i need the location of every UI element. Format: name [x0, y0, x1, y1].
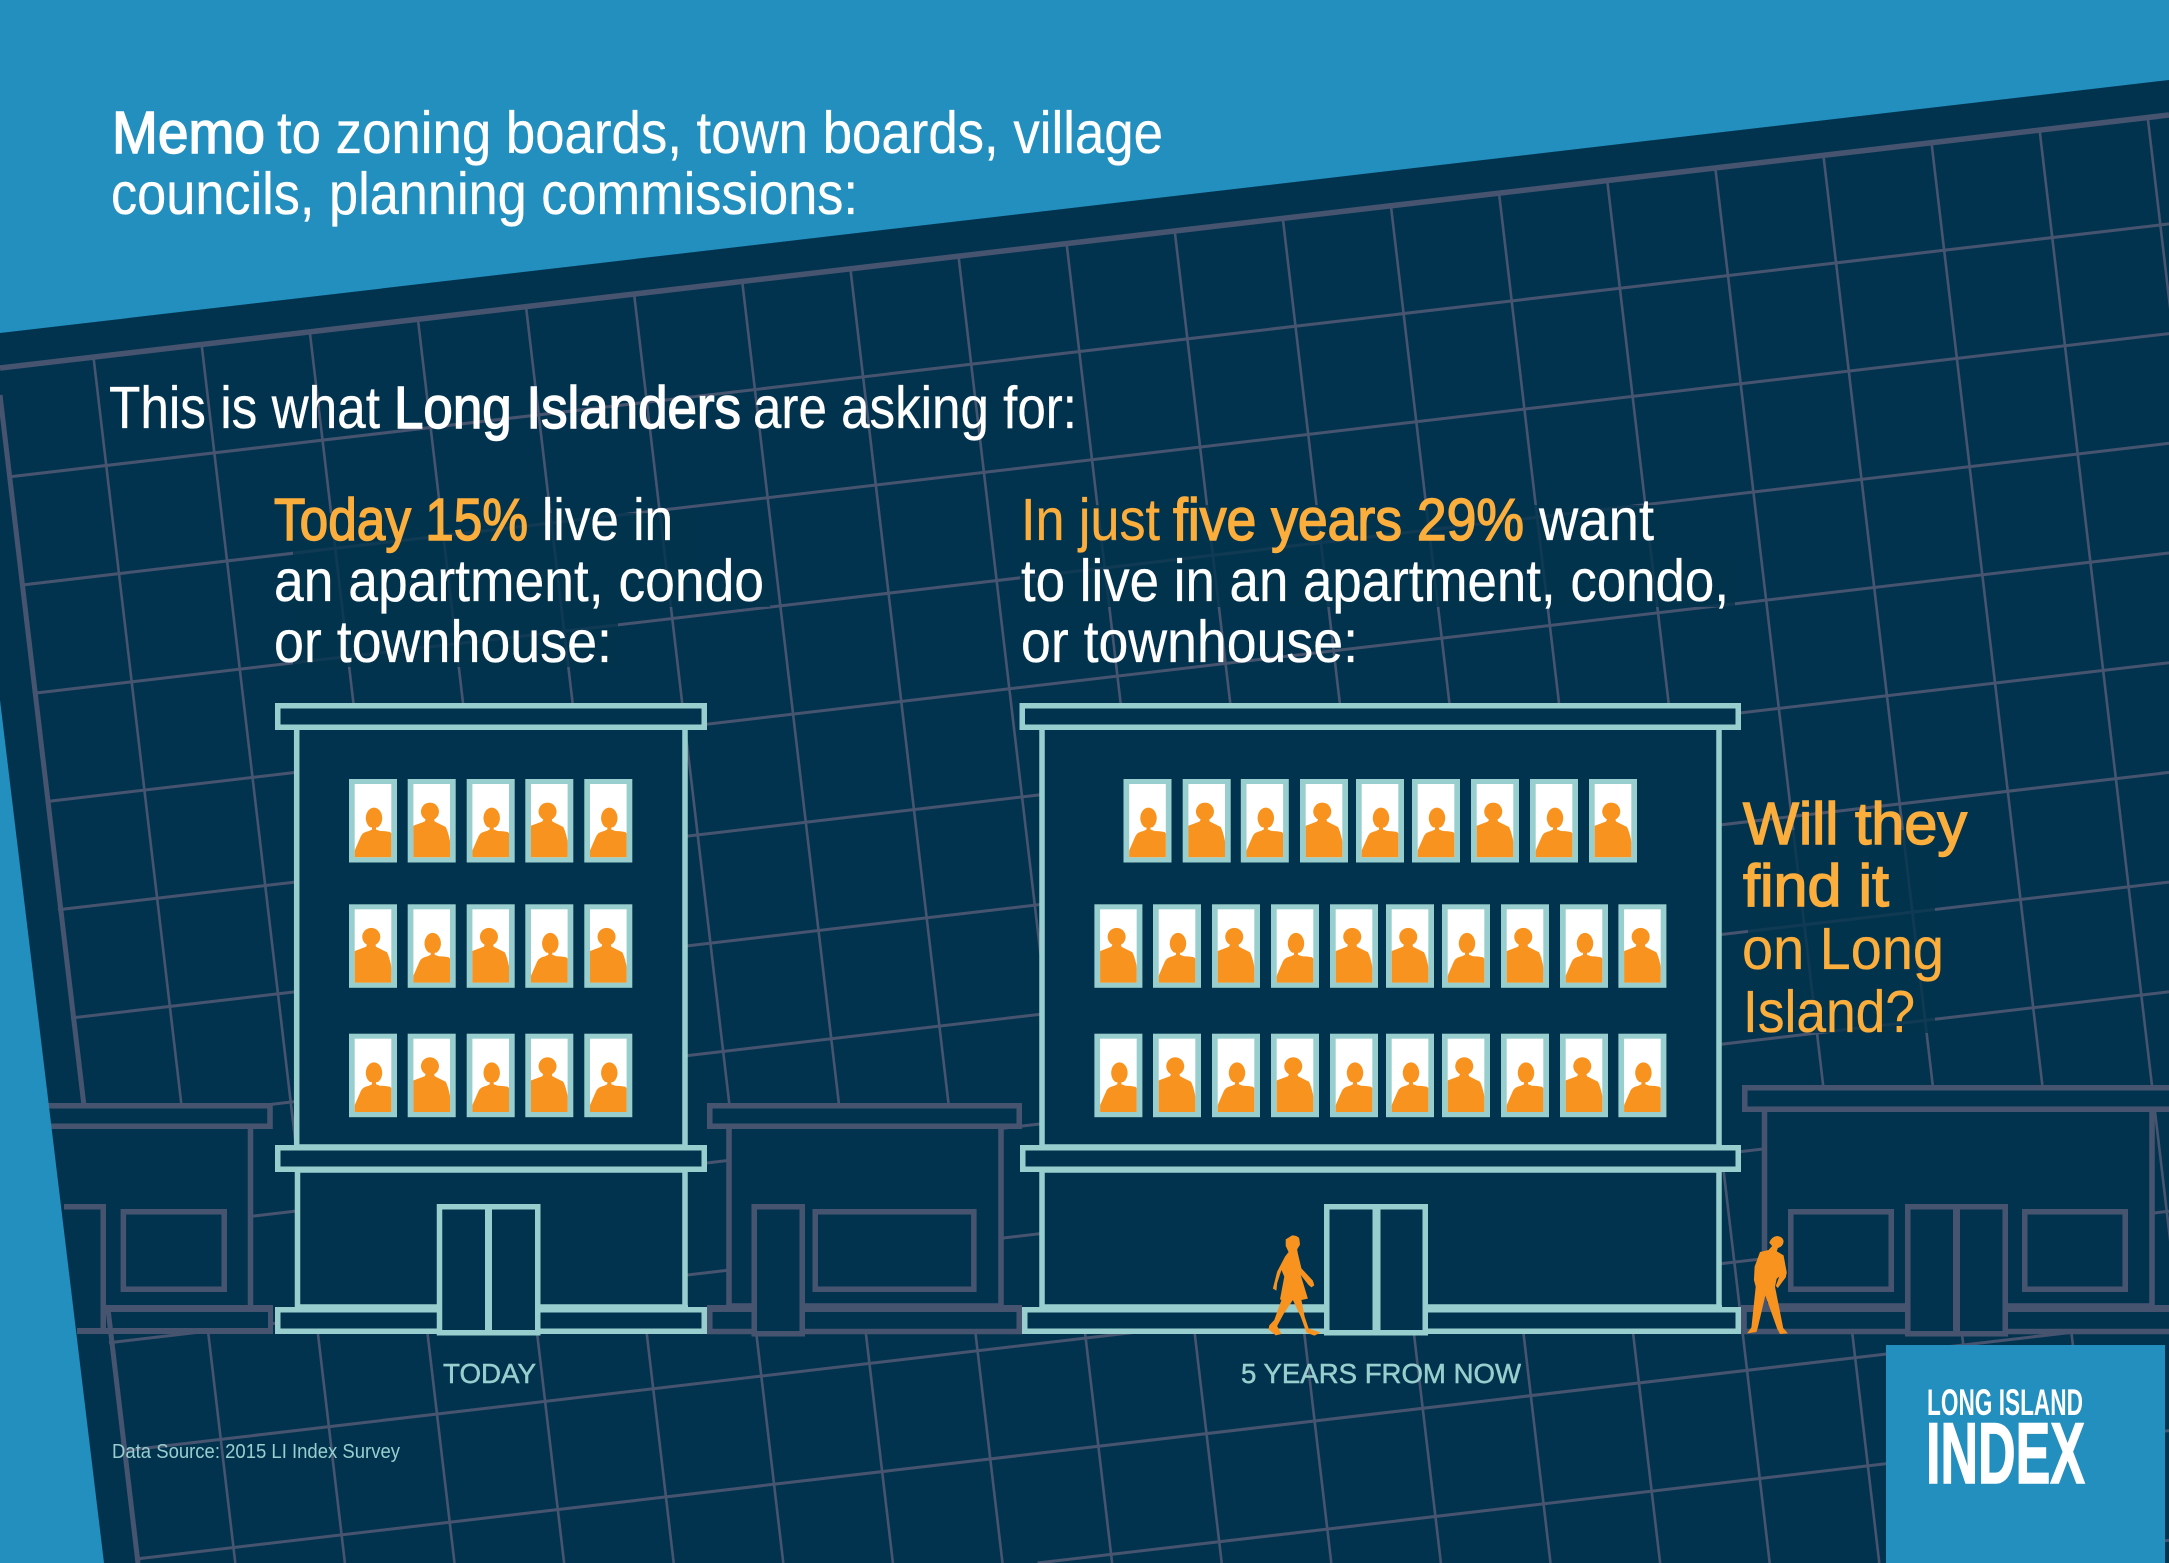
data source note: Data Source: 2015 LI Index Survey: [112, 1440, 401, 1463]
windows row 1: five years: [1124, 779, 1637, 862]
text: five years 29%: want: [1538, 487, 1654, 553]
text: five years 29%: or townhouse:: [1021, 609, 1358, 675]
callout: will they find it: find it: [1743, 853, 1889, 919]
building: today: [278, 706, 704, 1334]
label: 5 years from now: 5 YEARS FROM NOW: [1241, 1358, 1522, 1389]
door: today: [440, 1207, 538, 1334]
callout: will they find it: Island?: [1743, 979, 1915, 1045]
text: five years 29%: five years 29%: [1173, 487, 1524, 553]
text: today 15%: [274, 487, 764, 675]
neighbouring low building: middle: [707, 1106, 1022, 1334]
windows row 2: today: [349, 904, 632, 988]
text: today 15%: an apartment, condo: [274, 548, 764, 614]
heading: memo: [111, 100, 1163, 227]
text: today 15%: or townhouse:: [274, 609, 612, 675]
blue header wedge: [0, 0, 2169, 333]
door: five years: [1327, 1207, 1425, 1334]
label: today: TODAY: [443, 1358, 536, 1389]
subheading: what Long Islanders ask for: [109, 375, 1077, 441]
callout: will they find it: on Long: [1742, 916, 1944, 982]
text: today 15%: Today 15%: [274, 487, 528, 553]
windows row 3: five years: [1094, 1034, 1666, 1117]
text: five years 29%: [1021, 487, 1729, 675]
subheading: what Long Islanders ask for: Long Islanders: [394, 375, 741, 441]
text: five years 29%: In just: [1021, 487, 1160, 553]
heading: memo: Memo: [112, 100, 265, 166]
neighbouring low building: left: [0, 1106, 273, 1334]
heading: memo: to zoning boards, town boards, village: [277, 100, 1163, 166]
windows row 1: today: [349, 779, 632, 862]
subheading: what Long Islanders ask for: are asking for:: [753, 375, 1077, 441]
dimmed grid behind right column text: [1020, 505, 1735, 607]
text: five years 29%: to live in an apartment, condo,: [1021, 548, 1729, 614]
heading: memo: councils, planning commissions:: [111, 161, 858, 227]
neighbouring low building: right: [1741, 1088, 2169, 1334]
dimmed grid behind question text: [1748, 830, 1935, 1033]
icon: walking woman: [1269, 1235, 1321, 1336]
building: five years from now: [1022, 706, 1738, 1334]
windows row 2: five years: [1094, 904, 1666, 988]
callout: will they find it: [1742, 791, 1968, 1045]
blue left wedge: [0, 700, 104, 1563]
windows row 3: today: [349, 1034, 632, 1117]
logo: Long Island Index: [1886, 1345, 2165, 1563]
text: today 15%: live in: [542, 487, 673, 553]
subheading: what Long Islanders ask for: This is what: [109, 375, 380, 441]
icon: standing man: [1747, 1236, 1788, 1334]
dimmed grid behind left column text: [293, 513, 770, 667]
callout: will they find it: Will they: [1743, 791, 1968, 857]
